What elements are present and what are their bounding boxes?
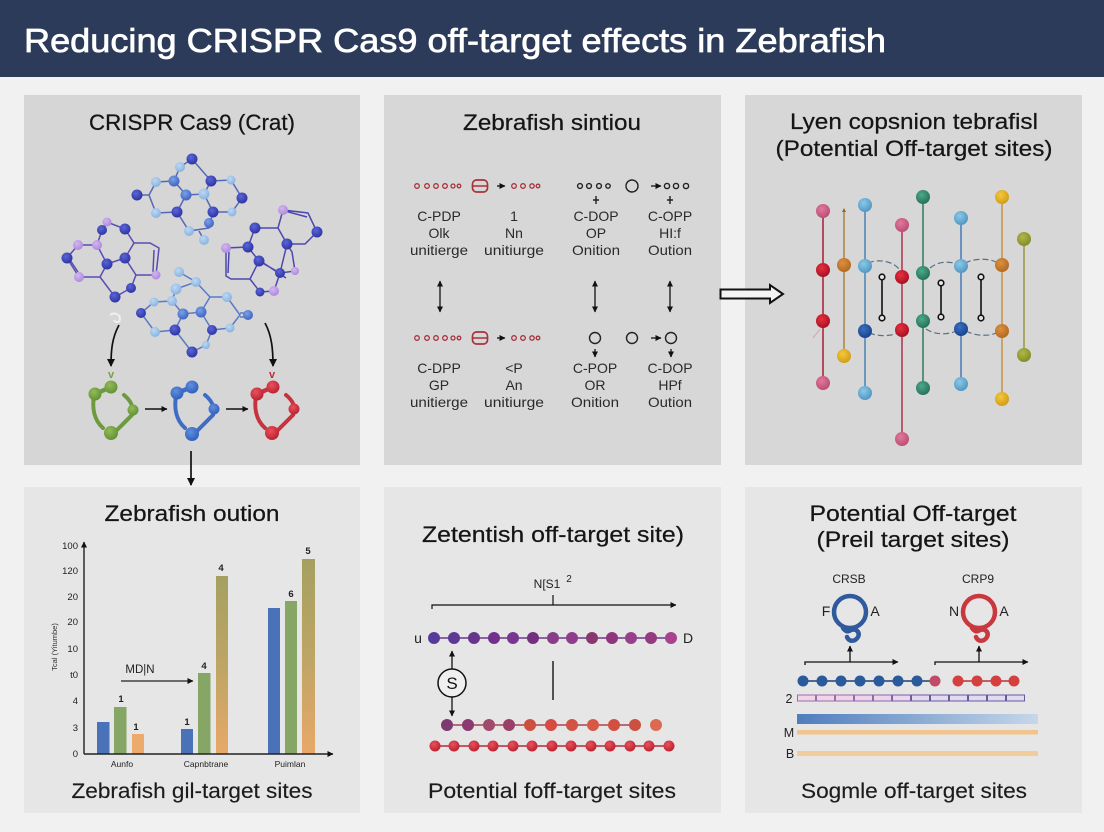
labels: bottom row: [410, 360, 693, 410]
x axis labels: Capnbtrane: [184, 759, 228, 769]
labels: top row: OP: [586, 225, 606, 241]
y axis labels: [62, 541, 78, 760]
labels: bottom row: C-POP: [573, 360, 617, 376]
label: 2: 2: [786, 692, 793, 706]
label: CRP9: CRP9: [962, 572, 994, 586]
value labels: [118, 546, 311, 733]
heading: Zebrafish sintiou: [463, 110, 641, 135]
x axis labels: Aunfo: [111, 759, 133, 769]
panel: Zebrafish sintiou: [384, 95, 721, 465]
loop labels: A: [999, 603, 1009, 619]
panel: Zebrafish oution: [24, 487, 360, 813]
icon: red loop: [963, 596, 995, 641]
labels: bottom row: unitiurge: [484, 394, 544, 410]
y axis title: Tcal (Yitumbe): [50, 623, 59, 671]
scale label: N[S1: [534, 577, 561, 591]
nodes: green strand: [916, 190, 930, 395]
labels: top row: C-OPP: [648, 208, 692, 224]
dashed arcs: [868, 259, 998, 336]
loop labels: A: [870, 603, 880, 619]
bars: group 2: [181, 576, 228, 754]
label: B: B: [786, 747, 794, 761]
labels: top row: C-PDP: [417, 208, 461, 224]
divider line: [552, 661, 554, 700]
value labels: 1: [118, 694, 124, 705]
nodes: red strand: [816, 204, 830, 390]
bars: group 1: [97, 707, 144, 754]
orange bar B: [797, 751, 1038, 756]
annotation arrow: [121, 680, 193, 682]
gradient bar: [797, 714, 1038, 724]
loop labels: N: [949, 603, 959, 619]
symbol: S with arrows: [438, 651, 466, 716]
heading: CRISPR Cas9 (Crat): [89, 110, 295, 135]
label: green v: v: [108, 369, 115, 381]
arrow: panel 1 to panel 4: [190, 451, 192, 485]
strand: mixed middle: [441, 719, 662, 731]
strand: red bottom: [430, 740, 674, 752]
icon: green ring: [88, 380, 138, 440]
labels: top row: 1: [510, 208, 518, 224]
labels: bottom row: C-DPP: [417, 360, 461, 376]
value labels: 4: [201, 661, 207, 672]
symbol: S with arrows: S: [446, 674, 458, 693]
labels: bottom row: Oution: [648, 394, 692, 410]
molecule: right: [221, 205, 322, 296]
panel: Potential Off-target: [745, 487, 1082, 813]
x axis labels: Puimlan: [275, 759, 306, 769]
label: red v: v: [269, 369, 276, 381]
labels: top row: Onition: [572, 242, 620, 258]
orange bar M: [797, 730, 1038, 734]
footer caption: Potential foff-target sites: [428, 780, 676, 803]
scale arrow: [432, 595, 676, 609]
y axis labels: t0: [70, 670, 78, 681]
heading: Zetentish off-target site): [422, 522, 684, 547]
title: Reducing CRISPR Cas9 off-target effects in Zebrafish: [24, 23, 886, 60]
bracket arrows: red: [935, 646, 1028, 665]
labels: top row: [410, 208, 692, 258]
y axis labels: 4: [73, 696, 78, 707]
labels: bottom row: An: [505, 377, 523, 393]
double arrows: [440, 281, 670, 312]
nodes: olive strand: [1017, 232, 1031, 362]
labels: top row: Nn: [505, 225, 523, 241]
labels: top row: unitiurge: [484, 242, 544, 258]
bracket arrows: blue: [805, 646, 898, 665]
value labels: 5: [305, 546, 311, 557]
y axis labels: 20: [67, 617, 78, 628]
panel: Zetentish off-target site: [384, 487, 721, 813]
labels: top row: C-DOP: [573, 208, 619, 224]
annotation: MD|N: [125, 664, 155, 676]
scale exponent: 2: [566, 574, 572, 585]
value labels: 1: [133, 722, 139, 733]
arrow: blue to red: [226, 408, 248, 410]
icon: small swirl: [110, 314, 120, 322]
header banner: [0, 0, 1104, 77]
label: CRSB: CRSB: [832, 572, 866, 586]
diagram: bottom dark sequence: [590, 332, 676, 357]
bars: group 3: [268, 559, 315, 754]
loop labels: [822, 603, 1009, 619]
bar chart: [50, 541, 333, 769]
molecule: top: [132, 154, 248, 245]
strand: blue and red beads: [798, 676, 1020, 686]
arrow: hollow flow arrow: [720, 285, 783, 303]
nodes: blue strand: [858, 198, 872, 400]
icon: blue loop: [834, 596, 866, 641]
nodes: second blue strand: [954, 211, 968, 391]
x axis labels: [111, 759, 306, 769]
labels: bottom row: Onition: [571, 394, 619, 410]
labels: bottom row: unitierge: [410, 394, 468, 410]
y axis labels: 0: [73, 749, 78, 760]
labels: bottom row: C-DOP: [647, 360, 693, 376]
heading: Zebrafish oution: [104, 501, 280, 526]
diagram: top red sequence: [415, 180, 540, 192]
value labels: 1: [184, 717, 190, 728]
y axis labels: 100: [62, 541, 78, 552]
y axis labels: 20: [67, 592, 78, 603]
label: u: u: [414, 630, 422, 646]
footer caption: Zebrafish gil-target sites: [72, 780, 312, 803]
heading: Potential Off-target: [810, 501, 1017, 526]
arrow: green to blue: [145, 408, 167, 410]
y axis labels: 120: [62, 566, 78, 577]
labels: bottom row: <P: [505, 360, 523, 376]
loop labels: F: [822, 603, 830, 619]
labels: bottom row: OR: [584, 377, 606, 393]
segmented track: [798, 695, 1024, 701]
black dumbbell links: [879, 274, 984, 321]
strand: purple top: [428, 632, 677, 644]
nodes: orange strand: [837, 208, 851, 363]
molecule: left: [62, 218, 160, 302]
icon: red ring: [250, 380, 300, 440]
icon: blue ring: [170, 380, 220, 441]
diagram: bottom red sequence: [415, 332, 540, 344]
nodes: yellow strand: [995, 190, 1009, 406]
labels: top row: unitierge: [410, 242, 468, 258]
heading line 2: (Preil target sites): [816, 527, 1010, 552]
panel: potential off-target sites: [745, 95, 1082, 465]
molecule: bottom: [136, 267, 253, 358]
diagram: top dark sequence: [578, 180, 689, 204]
strands: [813, 197, 1024, 439]
nodes: pink strand: [895, 218, 909, 446]
y axis labels: 10: [67, 644, 78, 655]
footer caption: Sogmle off-target sites: [801, 780, 1027, 803]
heading line 2: (Potential Off-target sites): [776, 136, 1052, 161]
label: M: M: [784, 726, 794, 740]
labels: top row: Oution: [648, 242, 692, 258]
arrow: left molecule to green ring: [111, 325, 119, 366]
labels: bottom row: HPf: [658, 377, 682, 393]
labels: top row: HI:f: [659, 225, 681, 241]
panel: CRISPR Cas9: [24, 95, 360, 465]
value labels: 6: [288, 589, 294, 600]
value labels: 4: [218, 563, 224, 574]
labels: top row: Olk: [428, 225, 450, 241]
heading: Lyen copsnion tebrafisl: [790, 109, 1038, 134]
label: D: D: [683, 630, 693, 646]
arrow: bottom molecule to red ring: [265, 323, 273, 366]
labels: bottom row: GP: [429, 377, 449, 393]
y axis labels: 3: [73, 723, 78, 734]
axes: [84, 542, 333, 754]
